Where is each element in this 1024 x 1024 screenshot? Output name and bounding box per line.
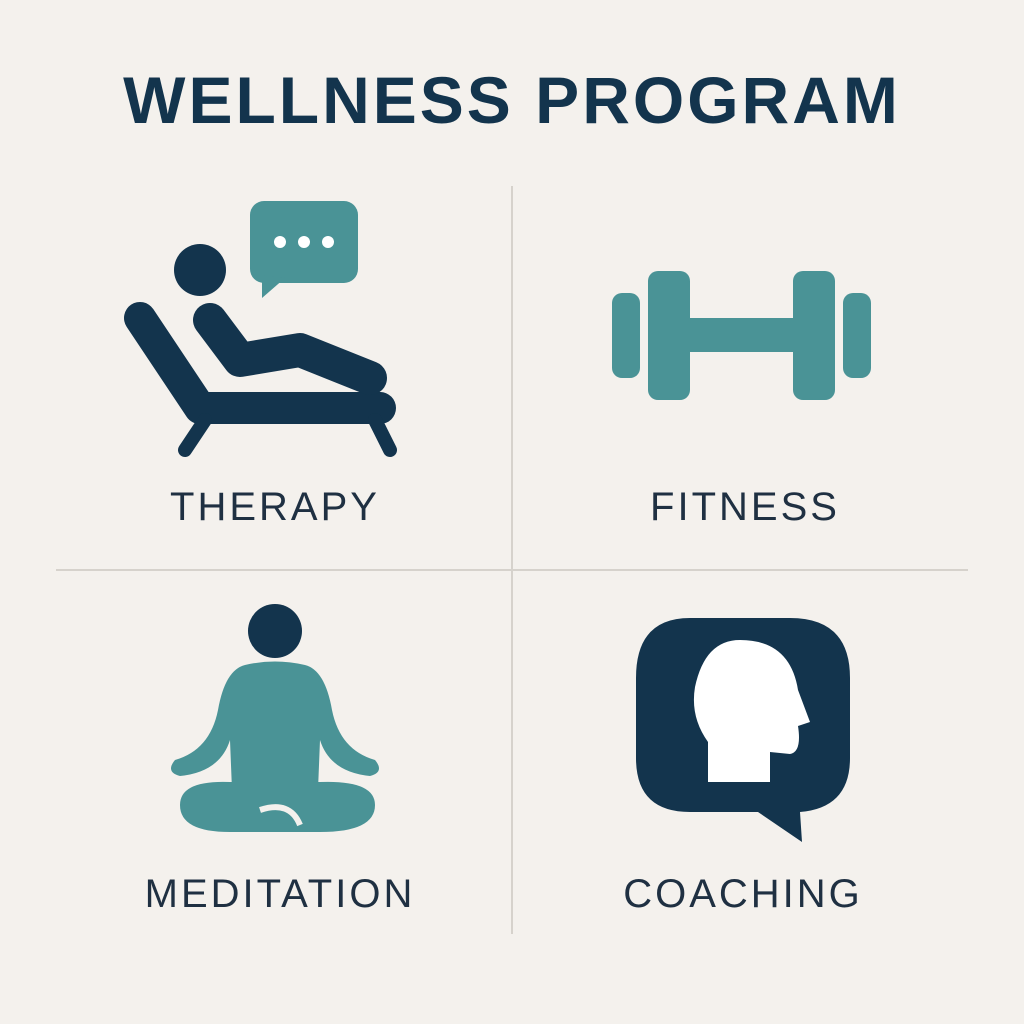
label: therapy: THERAPY [170, 485, 380, 529]
label: coaching: COACHING [623, 872, 863, 916]
label: fitness: FITNESS [650, 485, 840, 529]
icon: dumbbell [612, 271, 871, 400]
icon: meditation [171, 604, 379, 832]
icon: therapy [124, 201, 397, 457]
label: meditation: MEDITATION [145, 872, 415, 916]
title: WELLNESS PROGRAM [123, 63, 901, 137]
icon: coaching [636, 618, 850, 842]
